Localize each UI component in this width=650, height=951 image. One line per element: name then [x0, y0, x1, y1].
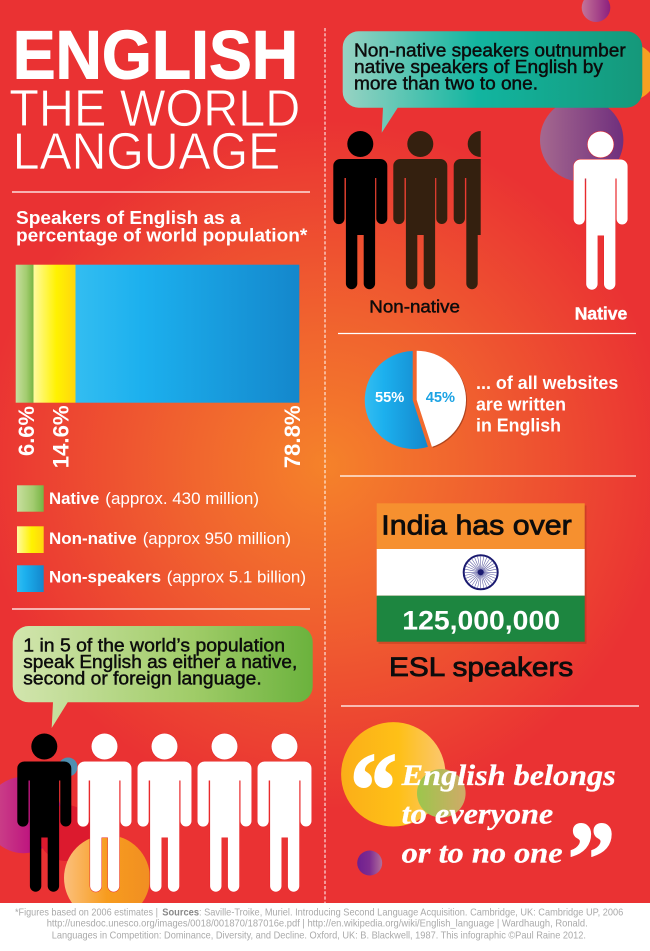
- icon: Ashoka chakra: [464, 555, 498, 589]
- quote: to everyone: [402, 797, 553, 830]
- person: white 1: [78, 734, 132, 892]
- speech bubble: 1 in 5: [13, 626, 313, 728]
- person: brown: [393, 131, 447, 289]
- speech bubble: 1 in 5: 1 in 5 of the world’s population: [23, 635, 285, 656]
- stacked bar chart: [16, 265, 299, 403]
- speech bubble: non-native speakers: more than two to one.: [354, 72, 538, 93]
- speech bubble: non-native speakers: native speakers of English by: [354, 56, 604, 77]
- legend: non-speakers: Non-speakers: [49, 568, 161, 587]
- person: black: [17, 734, 71, 892]
- bar segment: non-native: [34, 265, 76, 403]
- legend: [17, 485, 306, 592]
- websites text: ... of all websites: [476, 373, 618, 393]
- pie chart: [365, 351, 467, 449]
- heading: speakers of English: Speakers of English as a: [16, 208, 242, 228]
- websites text: [476, 373, 618, 436]
- person: white 3: [198, 734, 252, 892]
- quote: [350, 731, 616, 917]
- pie slice: 55%: [365, 351, 428, 449]
- footer sources: *Figures based on 2006 estimates |: [15, 906, 158, 918]
- person: white 4: [258, 734, 312, 892]
- people: non-native group: [333, 131, 481, 290]
- title: ENGLISH: [13, 17, 298, 94]
- label: ESL speakers: ESL speakers: [389, 652, 573, 682]
- India flag panel: [377, 503, 586, 644]
- legend: native: [17, 485, 259, 512]
- pie shadow: [418, 352, 467, 448]
- label: native: Native: [575, 303, 628, 323]
- bar labels: 6.6%: [14, 406, 39, 456]
- websites text: are written: [476, 395, 566, 415]
- pie slice: 45%: [417, 351, 466, 447]
- India flag panel: 125,000,000: [402, 605, 560, 635]
- quote: or to no one: [402, 836, 563, 869]
- label: non-native: Non-native: [369, 297, 460, 317]
- footer sources: Sources: [162, 906, 199, 918]
- centre dashed divider: [324, 28, 326, 903]
- decorative circles: quote: [341, 722, 466, 876]
- title: THE WORLD: [9, 80, 300, 138]
- legend: non-speakers: (approx 5.1 billion): [167, 568, 306, 587]
- closing quote mark: ”: [568, 800, 615, 917]
- legend: non-native: Non-native: [49, 529, 137, 548]
- websites text: in English: [476, 416, 561, 436]
- pie chart: 45%: [426, 389, 455, 406]
- speech bubble: non-native speakers: [343, 31, 642, 133]
- bar labels: 14.6%: [48, 405, 73, 468]
- person: native: [574, 132, 628, 290]
- heading: speakers of English: percentage of world population*: [16, 226, 307, 246]
- footer sources: Languages in Competition: Dominance, Diversity, and Decline. Oxford, UK: B. Blackwell, 1987. This infographic ©Paul Raine 2012.: [52, 929, 586, 941]
- legend: non-speakers: [17, 565, 306, 592]
- speech bubble: 1 in 5: second or foreign language.: [23, 667, 262, 688]
- legend: non-native: [17, 526, 291, 553]
- title: LANGUAGE: [13, 123, 280, 181]
- person: brown cropped: [454, 131, 481, 290]
- India flag panel: India has over: [381, 509, 572, 540]
- legend: native: Native: [49, 489, 99, 508]
- decorative circles: top right: [540, 0, 650, 182]
- legend: non-native: (approx 950 million): [143, 529, 291, 548]
- legend: native: (approx. 430 million): [105, 489, 259, 508]
- person: black: [333, 131, 387, 289]
- bar segment: non-speakers: [76, 265, 299, 403]
- bar segment: native: [16, 265, 33, 403]
- people row: 1 in 5: [17, 734, 312, 892]
- opening quote mark: “: [350, 731, 397, 848]
- footer sources: http://unesdoc.unesco.org/images/0018/001870/187016e.pdf | http://en.wikipedia.org/wiki/English_language | Wardhaugh, Ronald.: [47, 918, 588, 930]
- pie chart: 55%: [375, 389, 404, 406]
- bar labels: 78.8%: [280, 405, 305, 468]
- speech bubble: 1 in 5: speak English as either a native,: [23, 651, 297, 672]
- bar labels: [14, 405, 305, 468]
- heading: speakers of English: [16, 208, 307, 246]
- quote: English belongs: [401, 759, 616, 792]
- person: white 2: [138, 734, 192, 892]
- footer sources: [15, 906, 623, 941]
- title: [9, 17, 300, 181]
- speech bubble: non-native speakers: Non-native speakers outnumber: [354, 40, 626, 60]
- decorative circles: bottom left: [0, 758, 150, 903]
